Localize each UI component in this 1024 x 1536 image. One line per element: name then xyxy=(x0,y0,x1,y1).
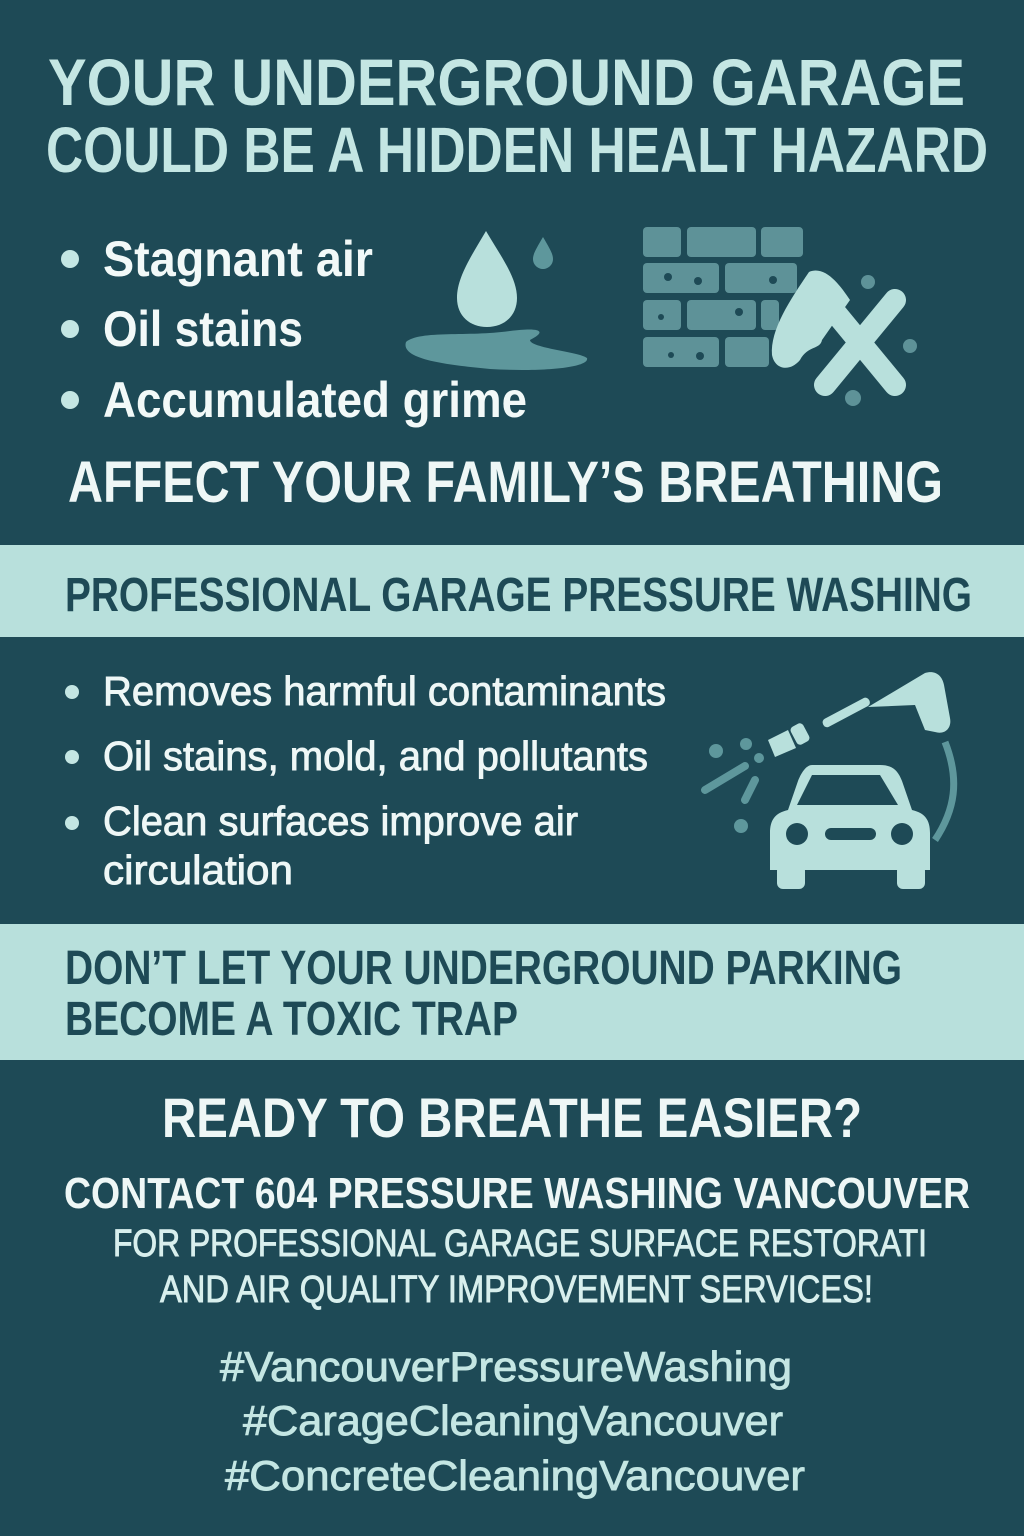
bullet list: hazards: Stagnant air xyxy=(103,231,373,287)
hashtags: #ConcreteCleaningVancouver xyxy=(225,1452,805,1499)
hashtags xyxy=(220,1343,805,1499)
hashtags: #CarageCleaningVancouver xyxy=(243,1397,783,1444)
hashtags: #VancouverPressureWashing xyxy=(220,1343,792,1390)
title xyxy=(46,45,988,186)
bullet list: hazards: Accumulated grime xyxy=(103,372,527,428)
bullet list: benefits xyxy=(65,668,666,893)
bullet list: hazards: Oil stains xyxy=(103,301,303,357)
bullet list: benefits: circulation xyxy=(103,847,293,893)
heading: ready to breathe easier: READY TO BREATHE EASIER? xyxy=(162,1086,862,1149)
bullet list: benefits: Clean surfaces improve air xyxy=(103,798,578,844)
band: professional pressure washing xyxy=(0,545,1024,637)
contact text block xyxy=(64,1169,970,1311)
contact text block: AND AIR QUALITY IMPROVEMENT SERVICES! xyxy=(160,1269,873,1311)
icon: oil drop and puddle xyxy=(406,231,587,370)
band: toxic trap warning: BECOME A TOXIC TRAP xyxy=(65,993,518,1046)
bullet list: benefits: Removes harmful contaminants xyxy=(103,668,666,714)
icon: brick wall with stain cross xyxy=(643,227,917,406)
bullet list: hazards xyxy=(61,231,527,428)
band: toxic trap warning xyxy=(0,924,1024,1060)
icon: pressure washer and car xyxy=(705,672,954,889)
bullet list: benefits: Oil stains, mold, and pollutants xyxy=(103,733,648,779)
